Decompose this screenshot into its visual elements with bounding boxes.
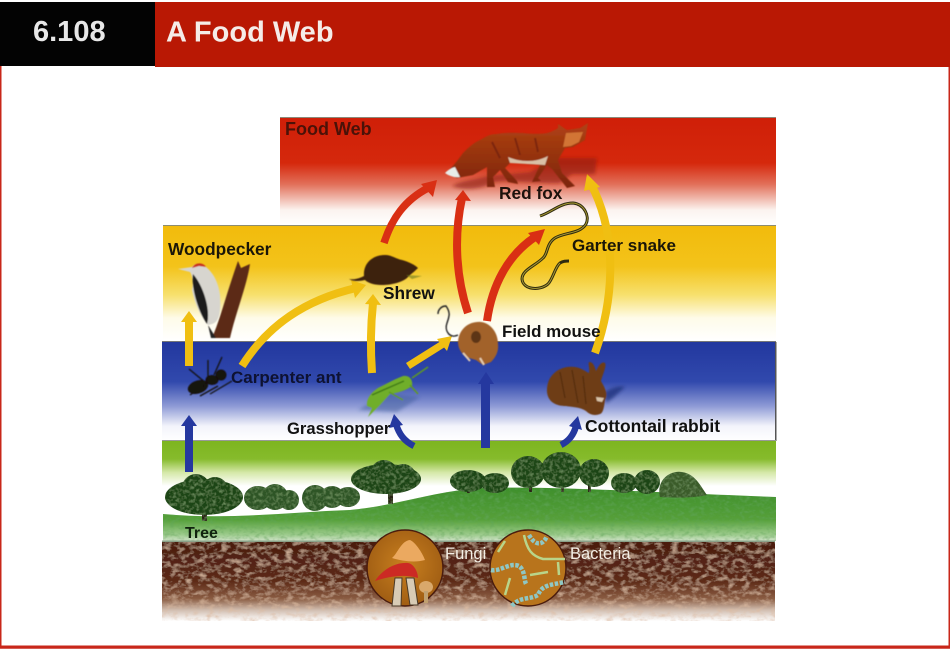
arrow: shrew to red fox bbox=[384, 180, 437, 243]
label: Garter snake: Garter snake bbox=[572, 236, 676, 255]
label: Carpenter ant: Carpenter ant bbox=[231, 368, 342, 387]
icon: cottontail rabbit bbox=[547, 362, 625, 415]
band: green level bbox=[162, 440, 776, 486]
arrow: tree to cottontail rabbit bbox=[561, 416, 582, 445]
header number block bbox=[0, 2, 155, 66]
arrow: carpenter ant to woodpecker bbox=[181, 311, 197, 366]
icon: field mouse bbox=[438, 306, 498, 365]
icon: grasshopper bbox=[358, 367, 428, 417]
header title bar: A Food Web bbox=[166, 16, 334, 48]
label: Fungi: Fungi bbox=[445, 545, 486, 563]
icon: garter snake bbox=[522, 203, 587, 288]
tree cluster: low bushes bbox=[244, 484, 360, 511]
band: yellow level bbox=[163, 225, 776, 341]
icon: bacteria circle bbox=[490, 530, 566, 606]
arrow: tree to grasshopper bbox=[389, 414, 414, 446]
band: red top level bbox=[280, 117, 776, 225]
tree: large middle bbox=[351, 460, 421, 504]
meadow ground bbox=[163, 488, 776, 541]
label: Cottontail rabbit: Cottontail rabbit bbox=[585, 416, 720, 436]
arrow: field mouse to red fox bbox=[455, 190, 471, 313]
arrow: carpenter ant to shrew bbox=[242, 280, 366, 366]
label: Shrew: Shrew bbox=[383, 283, 435, 303]
band: blue level bbox=[162, 341, 776, 441]
icon: red fox bbox=[445, 123, 597, 189]
icon: woodpecker bbox=[178, 261, 250, 338]
small mushroom bbox=[419, 581, 433, 603]
mushroom stems bbox=[392, 578, 418, 606]
trees bbox=[165, 452, 707, 521]
label: Food Web: Food Web bbox=[285, 119, 372, 139]
header bbox=[0, 2, 950, 67]
arrow: grasshopper to field mouse bbox=[406, 336, 452, 369]
arrow: tree to field mouse bbox=[478, 372, 494, 448]
arrow: field mouse to garter snake bbox=[487, 229, 545, 321]
label: Bacteria: Bacteria bbox=[570, 545, 631, 563]
arrow: tree to carpenter ant bbox=[181, 415, 197, 472]
label: Field mouse: Field mouse bbox=[502, 322, 601, 341]
label: Woodpecker: Woodpecker bbox=[168, 239, 272, 259]
tree cluster: distant trees bbox=[450, 452, 707, 498]
label: Grasshopper: Grasshopper bbox=[287, 419, 391, 438]
food web diagram bbox=[162, 117, 776, 621]
icon: fungi circle bbox=[367, 530, 443, 606]
soil layer bbox=[162, 540, 775, 621]
header number block: 6.108 bbox=[33, 16, 106, 48]
red mushroom cap bbox=[375, 563, 418, 581]
tan mushroom cap bbox=[392, 540, 425, 561]
tree: large left bbox=[165, 474, 243, 521]
label: Red fox: Red fox bbox=[499, 183, 563, 203]
arrow: grasshopper to shrew bbox=[365, 294, 381, 373]
label: Tree: Tree bbox=[185, 525, 218, 542]
arrow: cottontail rabbit to red fox bbox=[584, 174, 610, 353]
icon: shrew bbox=[349, 255, 422, 285]
header title bar bbox=[155, 2, 950, 67]
icon: carpenter ant bbox=[187, 357, 232, 396]
